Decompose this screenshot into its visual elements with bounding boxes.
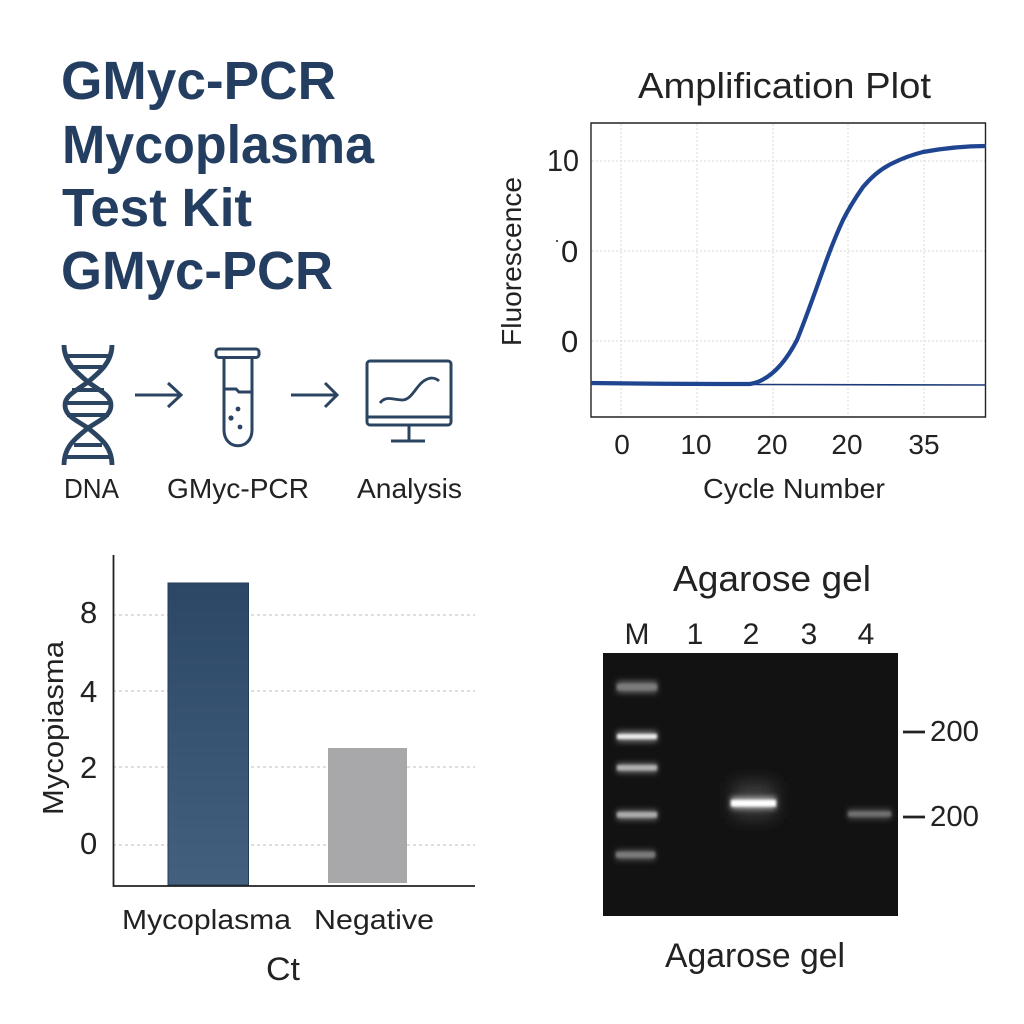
lane labels xyxy=(624,618,874,651)
bar x labels xyxy=(122,904,434,935)
marker ladder xyxy=(616,681,657,860)
title: Test Kit xyxy=(62,178,252,238)
icon: DNA helix xyxy=(64,345,112,465)
gel heading: Agarose gel xyxy=(673,558,871,599)
icon labels: GMyc-PCR xyxy=(167,473,309,504)
bar x title: Ct xyxy=(266,951,300,987)
title xyxy=(61,51,375,301)
size markers: 200 xyxy=(930,801,979,833)
agarose gel panel xyxy=(603,558,979,975)
icon: test tube xyxy=(216,349,259,446)
workflow diagram xyxy=(64,345,462,504)
lane labels: 1 xyxy=(687,618,703,651)
lane labels: 4 xyxy=(858,618,874,651)
x axis values: 0 xyxy=(614,429,630,460)
x axis label: Cycle Number xyxy=(703,473,885,504)
y axis values: 0 xyxy=(561,324,578,359)
bar grid xyxy=(113,615,475,845)
x axis values: 10 xyxy=(680,429,712,460)
bar y label: Mycopiasma xyxy=(38,640,70,815)
bar: Negative xyxy=(328,748,407,883)
lane 4 band xyxy=(848,809,891,819)
bar x labels: Negative xyxy=(314,904,434,935)
title: GMyc-PCR xyxy=(61,51,336,111)
y axis label: Fluorescence xyxy=(496,177,527,346)
icon labels: Analysis xyxy=(357,473,462,504)
size markers: 200 xyxy=(930,716,979,748)
title: Mycoplasma xyxy=(62,115,375,175)
lane 2 band xyxy=(731,782,776,818)
arrow: DNA to PCR xyxy=(135,383,181,407)
plot frame xyxy=(591,123,986,417)
bar x labels: Mycoplasma xyxy=(122,904,291,935)
lane labels: 2 xyxy=(743,618,759,651)
bar y values: 0 xyxy=(80,826,97,861)
lane labels: 3 xyxy=(801,618,817,651)
icon labels: DNA xyxy=(64,473,119,504)
y axis values xyxy=(547,143,579,359)
title: GMyc-PCR xyxy=(61,241,333,301)
plot grid xyxy=(592,124,985,417)
x axis values: 35 xyxy=(908,429,940,460)
size markers xyxy=(903,716,979,833)
amplification plot xyxy=(496,65,986,504)
plot heading: Amplification Plot xyxy=(638,65,931,106)
y axis values: 10 xyxy=(547,143,579,178)
bar y values: 2 xyxy=(80,750,97,785)
bar: Mycoplasma xyxy=(168,583,248,885)
bar y values: 4 xyxy=(80,674,97,709)
bar chart xyxy=(38,555,475,987)
x axis values: 20 xyxy=(756,429,788,460)
x axis values xyxy=(614,429,940,460)
y axis values: 0 xyxy=(561,234,578,269)
lane labels: M xyxy=(624,618,650,651)
bar y values: 8 xyxy=(80,595,97,630)
gel image xyxy=(603,653,898,916)
icon labels xyxy=(64,473,462,504)
baseline curve xyxy=(591,384,986,385)
gel caption: Agarose gel xyxy=(665,937,845,975)
bar y values xyxy=(80,595,97,861)
arrow: PCR to analysis xyxy=(291,383,337,407)
bar axes xyxy=(114,555,475,886)
icon: monitor xyxy=(367,361,451,441)
x axis values: 20 xyxy=(831,429,863,460)
amplification curve xyxy=(591,146,986,384)
